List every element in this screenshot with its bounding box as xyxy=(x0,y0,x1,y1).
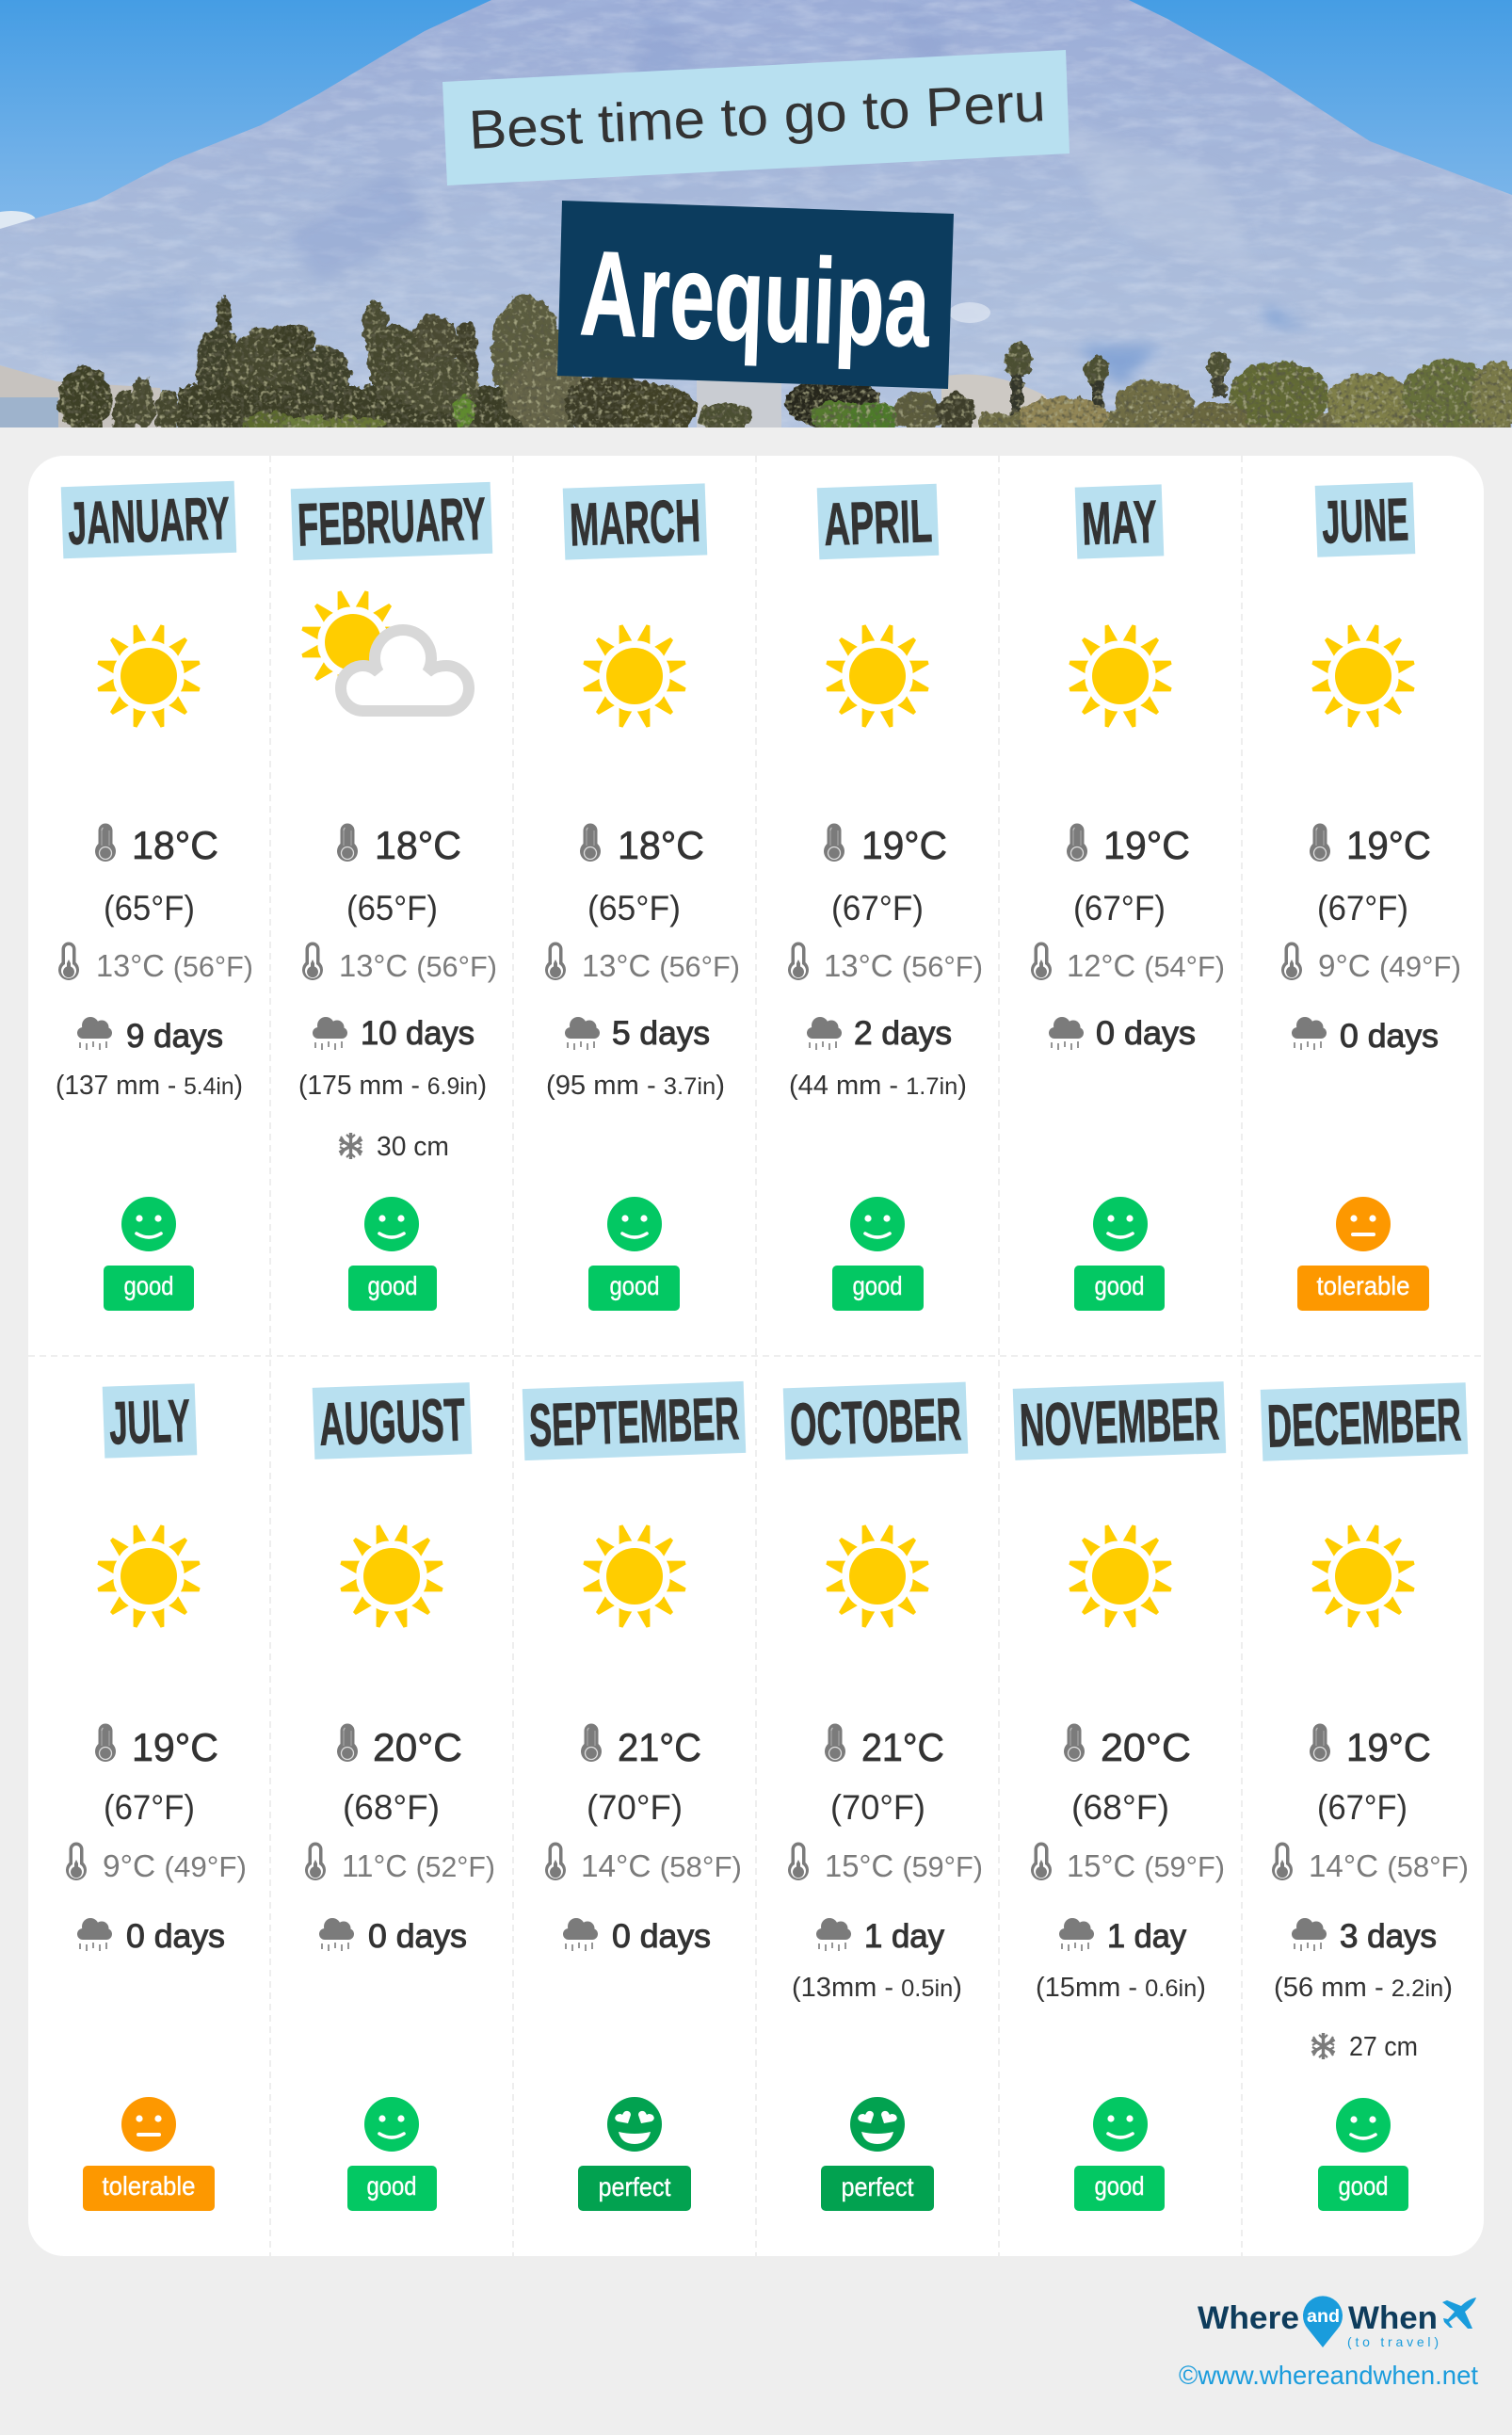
month: August: 0 days xyxy=(368,1918,467,1955)
month: October: 15°C (59°F) xyxy=(825,1848,983,1883)
month: May: 12°C (54°F) xyxy=(1067,948,1225,983)
month: February: 18°C xyxy=(375,823,461,867)
month: December: 14°C (58°F) xyxy=(1309,1848,1469,1883)
month: November: 1 day xyxy=(1107,1918,1186,1955)
month: October: (13mm - 0.5in) xyxy=(792,1973,962,2003)
month: September: perfect xyxy=(599,2172,671,2201)
month: January: good xyxy=(124,1271,173,1300)
month: August: 20°C xyxy=(373,1725,462,1769)
month: September: (70°F) xyxy=(587,1788,683,1827)
month: February xyxy=(291,482,497,1311)
month: December: 27 cm xyxy=(1349,2032,1418,2062)
copyright url: ©www.whereandwhen.net xyxy=(1179,2361,1478,2390)
month: December: 19°C xyxy=(1346,1725,1431,1769)
month: July: JULY xyxy=(108,1387,191,1457)
month: October xyxy=(783,1382,983,2211)
month: June: 0 days xyxy=(1340,1018,1439,1055)
month: October: 21°C xyxy=(861,1725,944,1769)
month: August: (68°F) xyxy=(343,1788,440,1827)
month: May: 19°C xyxy=(1103,823,1190,867)
month: May: MAY xyxy=(1081,488,1158,557)
month: February: (175 mm - 6.9in) xyxy=(298,1071,487,1101)
month: April: 2 days xyxy=(854,1015,952,1052)
month: February: FEBRUARY xyxy=(297,485,487,558)
month: March: (95 mm - 3.7in) xyxy=(546,1071,725,1101)
month: June: 19°C xyxy=(1346,823,1431,867)
city name banner xyxy=(557,201,954,389)
month: June: 9°C (49°F) xyxy=(1318,948,1461,983)
month: August: AUGUST xyxy=(318,1385,466,1459)
month: June: (67°F) xyxy=(1317,889,1408,927)
month: January: JANUARY xyxy=(67,484,231,557)
month: March: (65°F) xyxy=(587,889,681,927)
month: June: tolerable xyxy=(1316,1271,1410,1300)
logo: Where and When: Where xyxy=(1198,2300,1299,2336)
month: November: good xyxy=(1094,2171,1145,2201)
month: April: (44 mm - 1.7in) xyxy=(789,1071,967,1101)
month: March: good xyxy=(610,1271,659,1300)
month: July xyxy=(66,1383,247,2211)
month: April: APRIL xyxy=(823,487,933,558)
month: December: (56 mm - 2.2in) xyxy=(1274,1973,1453,2003)
month: March: 18°C xyxy=(618,823,704,867)
month: July: tolerable xyxy=(102,2171,196,2201)
month: October: 1 day xyxy=(864,1918,944,1955)
month: October: OCTOBER xyxy=(789,1385,962,1459)
month: May: (67°F) xyxy=(1073,889,1166,927)
icon: map pin xyxy=(1303,2296,1343,2347)
month: January: (65°F) xyxy=(104,889,195,927)
title banner xyxy=(442,50,1070,185)
month: July: 9°C (49°F) xyxy=(103,1848,247,1883)
month: October: (70°F) xyxy=(830,1788,925,1827)
month: January: 18°C xyxy=(132,823,218,867)
month: April: 19°C xyxy=(861,823,947,867)
month: April: 13°C (56°F) xyxy=(824,948,983,983)
month: September: 14°C (58°F) xyxy=(581,1848,742,1883)
month: May: 0 days xyxy=(1096,1015,1196,1052)
month: April: good xyxy=(853,1271,902,1300)
logo: Where and When: and xyxy=(1307,2307,1340,2327)
month: August xyxy=(305,1382,495,2211)
month: February: 10 days xyxy=(361,1015,475,1052)
month: April: (67°F) xyxy=(831,889,924,927)
month: July: 0 days xyxy=(126,1918,225,1955)
month: May xyxy=(1031,484,1225,1311)
month: September: SEPTEMBER xyxy=(528,1384,740,1459)
month: December: good xyxy=(1339,2171,1388,2201)
month: January: 9 days xyxy=(126,1018,223,1055)
month: June: JUNE xyxy=(1321,485,1409,556)
title text: Best time to go to Peru xyxy=(467,72,1047,161)
month: February: 30 cm xyxy=(377,1132,449,1162)
month: March: MARCH xyxy=(569,487,701,558)
month: December xyxy=(1261,1382,1469,2211)
month: August: good xyxy=(367,2171,416,2201)
month: November: (68°F) xyxy=(1071,1788,1169,1827)
month: February: good xyxy=(367,1271,418,1300)
month: November xyxy=(1013,1381,1226,2211)
month: August: 11°C (52°F) xyxy=(342,1848,495,1883)
month: March xyxy=(545,483,740,1311)
month: November: (15mm - 0.6in) xyxy=(1036,1973,1206,2003)
month: July: (67°F) xyxy=(104,1788,195,1827)
month: November: 15°C (59°F) xyxy=(1067,1848,1225,1883)
month: April xyxy=(788,484,983,1311)
month: January: (137 mm - 5.4in) xyxy=(56,1071,243,1101)
trees xyxy=(58,295,1512,439)
month: September: 21°C xyxy=(618,1725,701,1769)
month: October: perfect xyxy=(842,2172,914,2201)
logo: Where and When xyxy=(1198,2296,1476,2349)
month: July: 19°C xyxy=(132,1725,218,1769)
month: February: (65°F) xyxy=(346,889,438,927)
logo: Where and When: (to travel) xyxy=(1347,2334,1439,2349)
month: December: 3 days xyxy=(1340,1918,1437,1955)
month: June xyxy=(1281,482,1461,1311)
logo: Where and When: When xyxy=(1348,2300,1438,2336)
month: September: 0 days xyxy=(612,1918,711,1955)
month: March: 13°C (56°F) xyxy=(582,948,740,983)
month: March: 5 days xyxy=(612,1015,710,1052)
month: January: 13°C (56°F) xyxy=(96,948,253,983)
month: February: 13°C (56°F) xyxy=(339,948,497,983)
month: November: 20°C xyxy=(1101,1725,1191,1769)
month: September xyxy=(523,1381,746,2211)
mountain xyxy=(0,0,1512,427)
month: January xyxy=(56,481,253,1311)
month: November: NOVEMBER xyxy=(1019,1384,1220,1459)
icon: airplane xyxy=(1442,2298,1476,2329)
month: December: (67°F) xyxy=(1317,1788,1407,1827)
panel: calendar card xyxy=(28,456,1484,2256)
hero photo: mountain, sky and trees xyxy=(0,0,1512,439)
city name: Arequipa xyxy=(578,226,932,373)
month: May: good xyxy=(1094,1271,1145,1300)
